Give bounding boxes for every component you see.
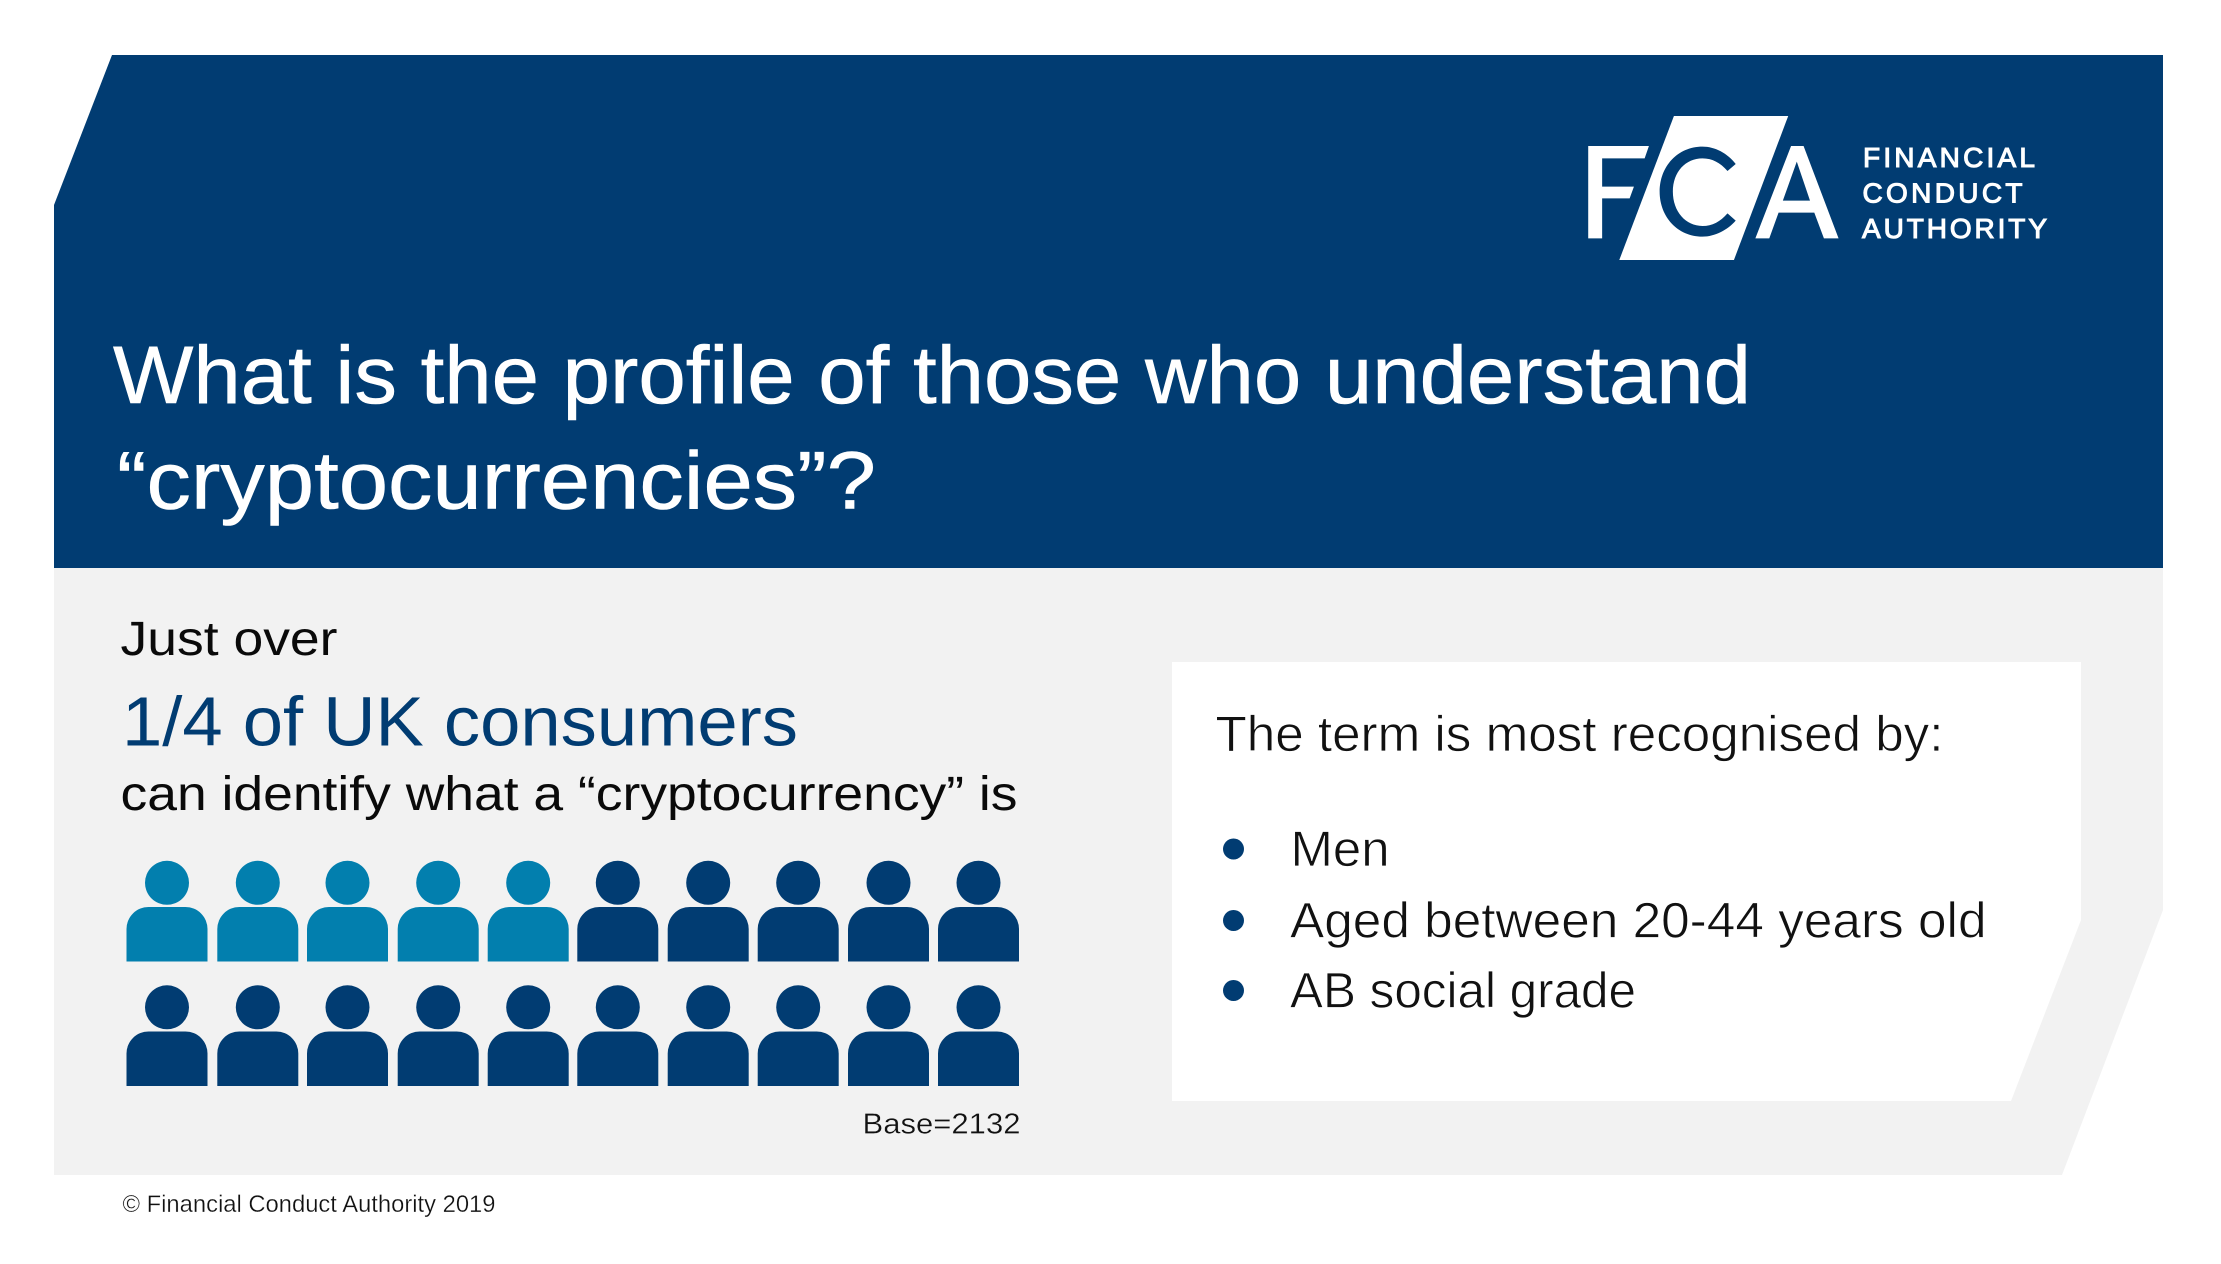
row 2 of people (126, 985, 1019, 1086)
heading: 1/4 of UK consumers: 1/4 of UK consumers (122, 682, 798, 760)
logo wordmark: FINANCIAL (1863, 142, 2035, 173)
list item: men (1223, 821, 1390, 877)
logo wordmark (1862, 142, 2047, 244)
title: What is the profile of those who understand (113, 330, 1751, 421)
text: just over: Just over (120, 613, 338, 666)
logo mark (1588, 116, 1839, 260)
logo: FCA (1588, 116, 2047, 260)
title (113, 330, 1751, 526)
list item: age: Aged between 20-44 years old (1290, 892, 1986, 948)
panel: navy header band (54, 55, 2163, 568)
panel: white callout (1172, 662, 2081, 1101)
pictogram: 20 people, 5 highlighted (126, 861, 1019, 1086)
logo wordmark: AUTHORITY (1862, 213, 2047, 244)
row 1 of people (126, 861, 1019, 962)
logo wordmark: CONDUCT (1862, 178, 2022, 209)
text: can identify: can identify what a “cryptocurrency” is (120, 768, 1018, 821)
panel: grey content background (54, 568, 2163, 1175)
callout heading: The term is most recognised by: (1216, 706, 1944, 762)
list item: social grade: AB social grade (1290, 962, 1636, 1018)
list item: men: Men (1290, 821, 1390, 877)
title: “cryptocurrencies”? (117, 436, 876, 526)
footer: copyright: © Financial Conduct Authority 2019 (122, 1191, 496, 1218)
text: base size: Base=2132 (862, 1108, 1020, 1140)
